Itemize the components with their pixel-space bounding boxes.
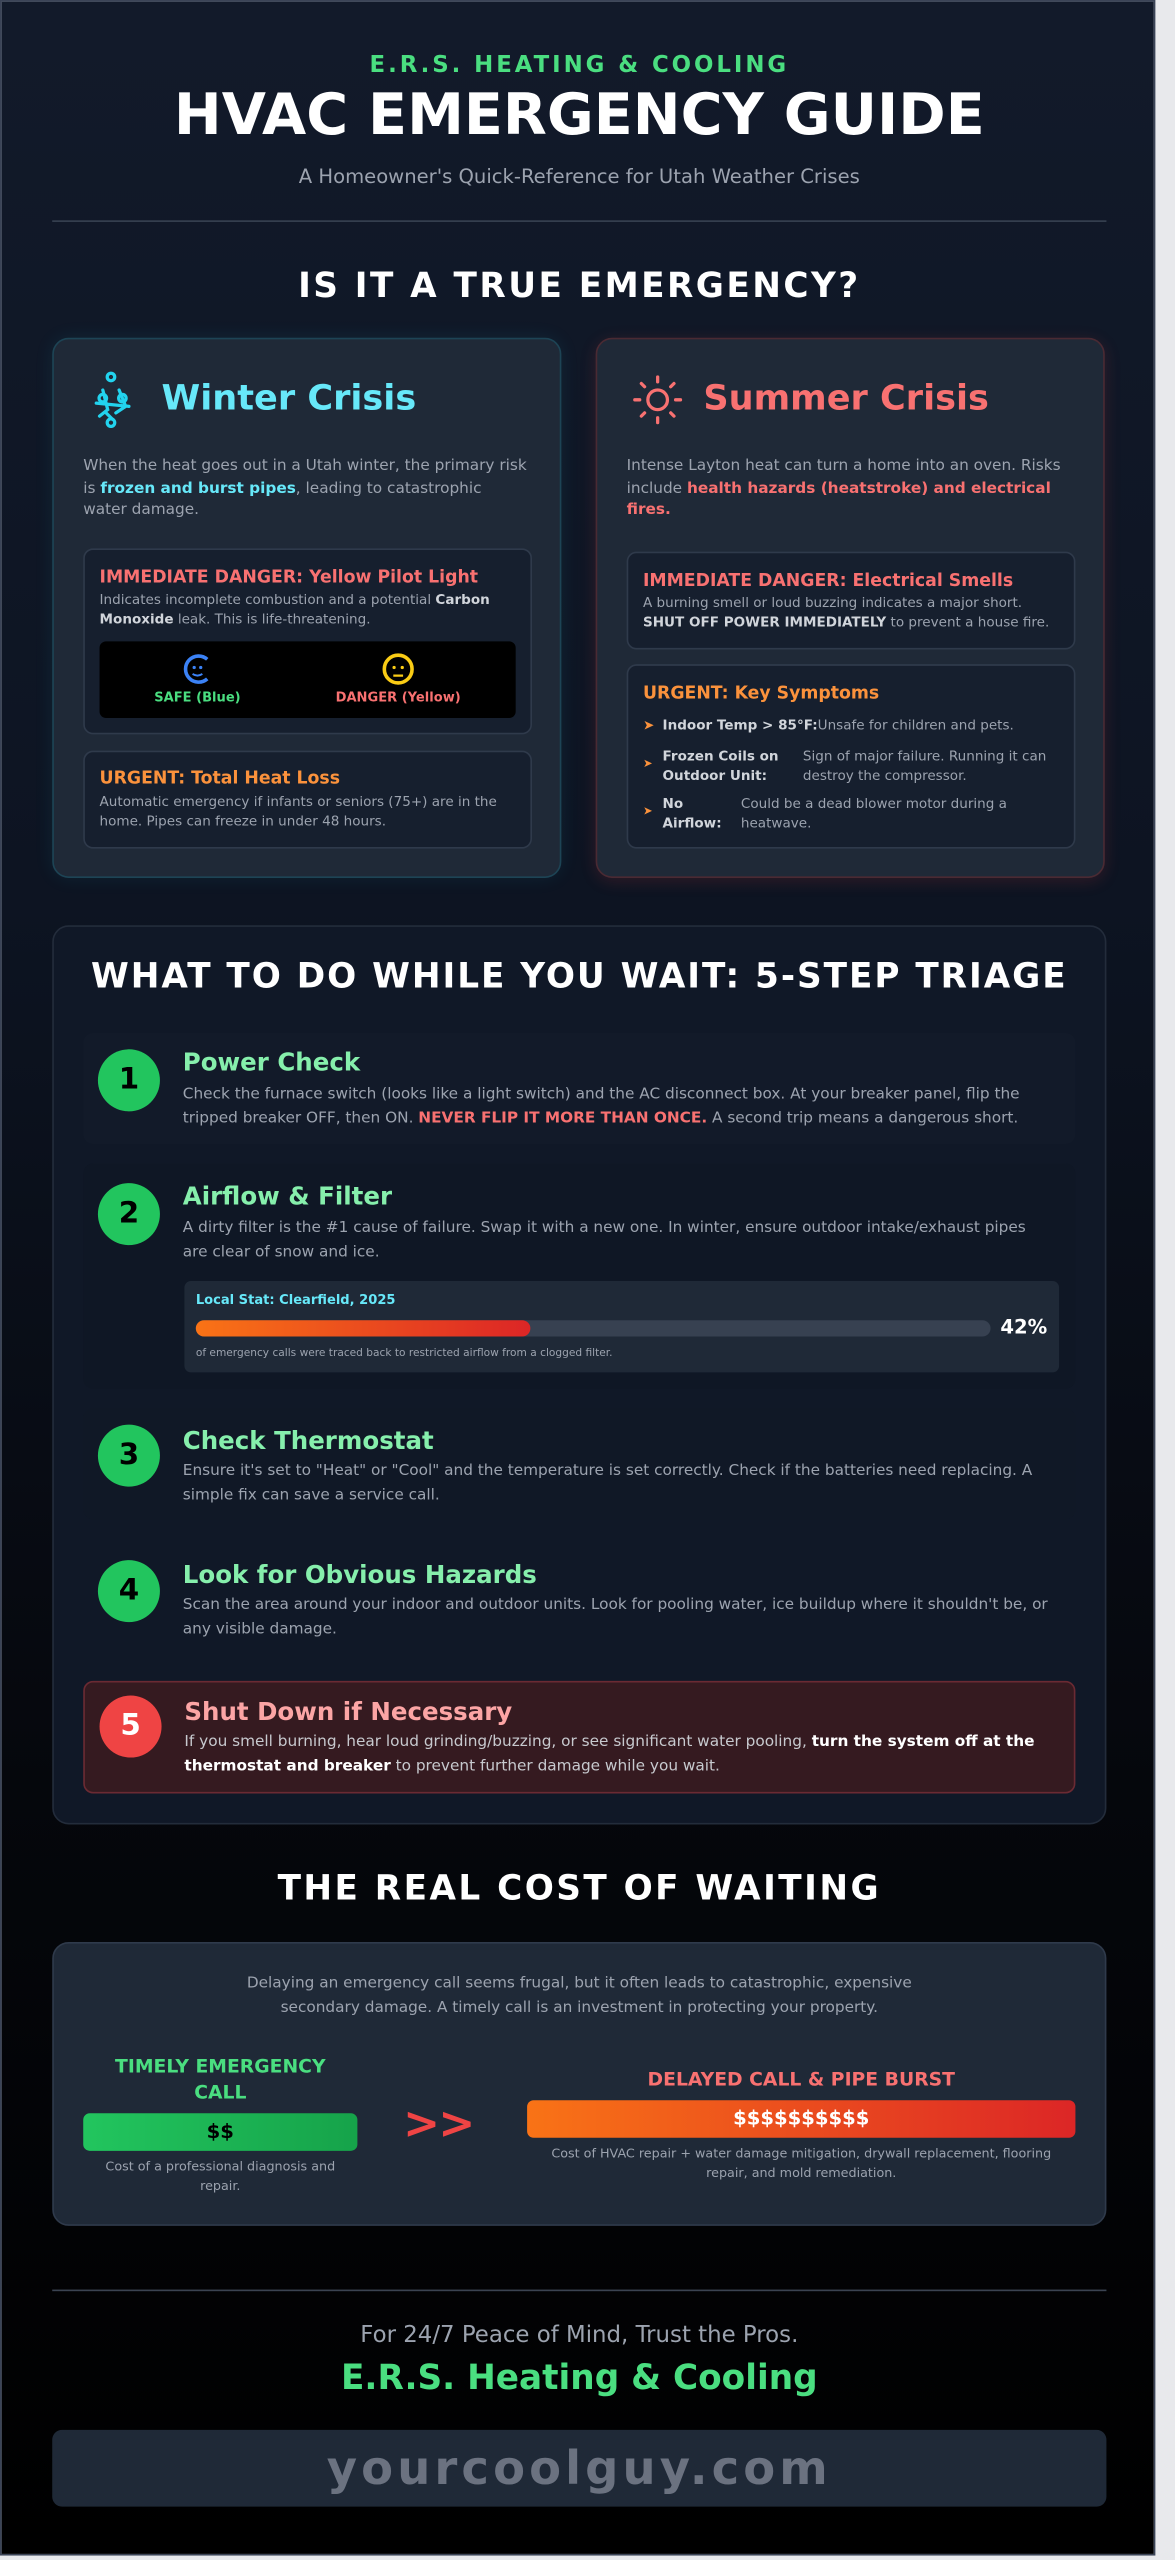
box: yellow pilot light [83,548,532,734]
box: key symptoms: URGENT: Key Symptoms [643,684,879,703]
box: total heat loss: Automatic emergency if infants or seniors (75+) are in the home. Pipes can freeze in under 48 hours. [100,793,497,829]
stat bar chart: Local Stat: Clearfield, 2025 [196,1292,396,1307]
box: key symptoms [627,664,1075,849]
step 2: 2 [119,1196,139,1230]
symptom list [643,716,1046,831]
box: electrical smells: A burning smell or loud buzzing indicates a major short. SHUT OFF POWER IMMEDIATELY to prevent a house fire. [643,594,1049,630]
symptom list: Sign of major failure. Running it can destroy the compressor. [803,747,1046,784]
symptom list: No Airflow: [663,795,722,831]
winter title: Winter Crisis [162,379,416,419]
panel: 5-step triage [52,925,1106,1824]
step 5: Shut Down if Necessary [184,1697,512,1727]
cost intro: Delaying an emergency call seems frugal, but it often leads to catastrophic, expensive secondary damage. A timely call is an investment in protecting your property. [247,1975,912,2016]
timely call column [83,2055,358,2193]
timely call column: $$ [207,2120,234,2143]
step 2 [83,1164,1075,1389]
triage heading: WHAT TO DO WHILE YOU WAIT: 5-STEP TRIAGE [91,956,1068,995]
step 4: Look for Obvious Hazards [183,1560,537,1589]
symptom list: Could be a dead blower motor during a heatwave. [741,795,1007,831]
winter intro: is frozen and burst pipes, leading to catastrophic [83,479,482,497]
website url box: yourcoolguy.com [327,2441,832,2495]
step 1: Check the furnace switch (looks like a light switch) and the AC disconnect box. At your breaker panel, flip the tripped breaker OFF, then ON. NEVER FLIP IT MORE THAN ONCE. A second trip means a dangerous short. [183,1085,1020,1128]
stat bar chart: 42% [1000,1315,1047,1338]
footer brand: E.R.S. Heating & Cooling [341,2358,818,2397]
symptom list: ➤ [643,805,653,818]
title: HVAC EMERGENCY GUIDE [174,83,985,149]
heading: is it a true emergency: IS IT A TRUE EMERGENCY? [298,266,861,305]
delayed call column: Cost of HVAC repair + water damage mitigation, drywall replacement, flooring repair, and mold remediation. [551,2146,1051,2180]
subtitle: A Homeowner's Quick-Reference for Utah Weather Crises [299,165,860,188]
step 2: A dirty filter is the #1 cause of failure. Swap it with a new one. In winter, ensure outdoor intake/exhaust pipes are clear of snow and ice. [183,1219,1026,1261]
header kicker: E.R.S. HEATING & COOLING [370,52,789,78]
icon: snowflake [94,372,131,428]
summer title: Summer Crisis [703,379,989,419]
step 1: 1 [119,1062,139,1097]
step 5: 5 [120,1709,141,1743]
pilot light indicator [100,641,516,718]
symptom list: ➤ [643,757,653,770]
step 3 [83,1408,1075,1519]
step 4 [98,1560,1048,1638]
icon: sun [633,375,682,424]
delayed call column: $$$$$$$$$$ [733,2107,869,2130]
panel: summer crisis [596,338,1105,878]
arrow: greater than: >> [403,2099,474,2149]
box: total heat loss [83,751,532,849]
step 3: 3 [119,1438,139,1472]
box: total heat loss: URGENT: Total Heat Loss [100,769,340,788]
step 3: Check Thermostat [183,1426,434,1456]
step 5 [83,1681,1075,1793]
icon: safe blue flame [184,654,208,684]
stat bar chart: of emergency calls were traced back to restricted airflow from a clogged filter. [196,1346,613,1359]
winter intro: When the heat goes out in a Utah winter, the primary risk [83,457,527,475]
stat bar chart [184,1281,1059,1372]
website url box [52,2430,1106,2507]
symptom list: Indoor Temp > 85°F: [663,716,818,733]
step 4: Scan the area around your indoor and outdoor units. Look for pooling water, ice buildup where it shouldn't be, or any visible damage. [183,1596,1048,1638]
box: electrical smells [627,552,1075,649]
delayed call column [527,2068,1076,2180]
pilot light indicator: DANGER (Yellow) [336,690,461,705]
step 4: 4 [119,1573,139,1607]
step 3: Ensure it's set to "Heat" or "Cool" and the temperature is set correctly. Check if the batteries need replacing. A simple fix can save a service call. [183,1462,1032,1505]
footer tagline: For 24/7 Peace of Mind, Trust the Pros. [360,2322,798,2348]
panel: winter crisis [52,338,561,878]
panel: cost comparison [52,1942,1106,2226]
pilot light indicator: SAFE (Blue) [154,690,241,705]
icon: danger yellow flame [382,653,414,685]
box: yellow pilot light: Indicates incomplete combustion and a potential Carbon Monoxide leak. This is life-threatening. [100,591,490,627]
timely call column: Cost of a professional diagnosis and repair. [105,2159,335,2193]
summer intro: Intense Layton heat can turn a home into an oven. Risks include health hazards (heatstroke) and electrical fires. [627,457,1061,519]
symptom list: ➤ [643,716,654,733]
box: electrical smells: IMMEDIATE DANGER: Electrical Smells [643,571,1013,591]
symptom list: Unsafe for children and pets. [818,716,1014,733]
winter intro: water damage. [83,501,199,519]
timely call column: TIMELY EMERGENCY CALL [115,2055,326,2104]
winter intro [83,457,527,519]
delayed call column: DELAYED CALL & PIPE BURST [648,2068,955,2090]
symptom list: Frozen Coils on Outdoor Unit: [663,747,779,784]
step 5: If you smell burning, hear loud grinding/buzzing, or see significant water pooling, turn the system off at the thermostat and breaker to prevent further damage while you wait. [184,1733,1035,1776]
step 2: Airflow & Filter [183,1181,392,1211]
step 1: Power Check [183,1048,360,1077]
step 1 [83,1033,1075,1144]
heading: real cost of waiting: THE REAL COST OF WAITING [278,1869,881,1908]
box: yellow pilot light: IMMEDIATE DANGER: Yellow Pilot Light [100,568,478,587]
